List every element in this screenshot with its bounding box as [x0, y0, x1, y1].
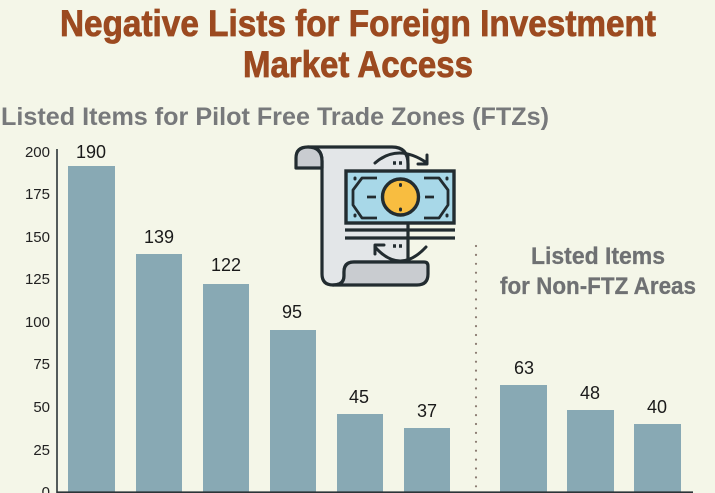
value labels [76, 142, 667, 421]
title [60, 3, 656, 85]
y axis labels: 100 [25, 314, 50, 331]
title: Market Access [243, 44, 473, 85]
heading: non-FTZ items: for Non-FTZ Areas [500, 273, 696, 300]
heading: FTZ items: Listed Items for Pilot Free Trade Zones (FTZs) [1, 103, 549, 131]
bar chart: non-FTZ [500, 385, 681, 493]
value labels: 122 [211, 255, 241, 275]
bar chart: FTZ [68, 166, 450, 493]
y axis labels: 200 [25, 144, 50, 161]
value labels: 37 [417, 401, 437, 421]
icon: arrows [375, 153, 427, 261]
icon: coin [382, 179, 418, 215]
divider [475, 246, 477, 490]
heading: non-FTZ items [500, 243, 696, 300]
y axis labels: 125 [25, 271, 50, 288]
y axis labels [25, 144, 50, 493]
y axis labels: 50 [33, 399, 50, 416]
y axis labels: 75 [33, 356, 50, 373]
value labels: 190 [76, 142, 106, 162]
heading: non-FTZ items: Listed Items [531, 243, 665, 270]
y axis labels: 150 [25, 229, 50, 246]
y axis labels: 175 [25, 186, 50, 203]
value labels: 40 [647, 397, 667, 417]
icon: money document [296, 147, 455, 285]
icon: text lines [345, 230, 455, 238]
value labels: 139 [144, 227, 174, 247]
axes [57, 149, 693, 492]
y axis labels: 25 [33, 442, 50, 459]
value labels: 48 [580, 383, 600, 403]
title: Negative Lists for Foreign Investment [60, 3, 656, 44]
icon: scroll body [308, 147, 408, 285]
value labels: 95 [282, 302, 302, 322]
icon: banknote [346, 171, 454, 223]
value labels: 63 [514, 358, 534, 378]
value labels: 45 [349, 387, 369, 407]
